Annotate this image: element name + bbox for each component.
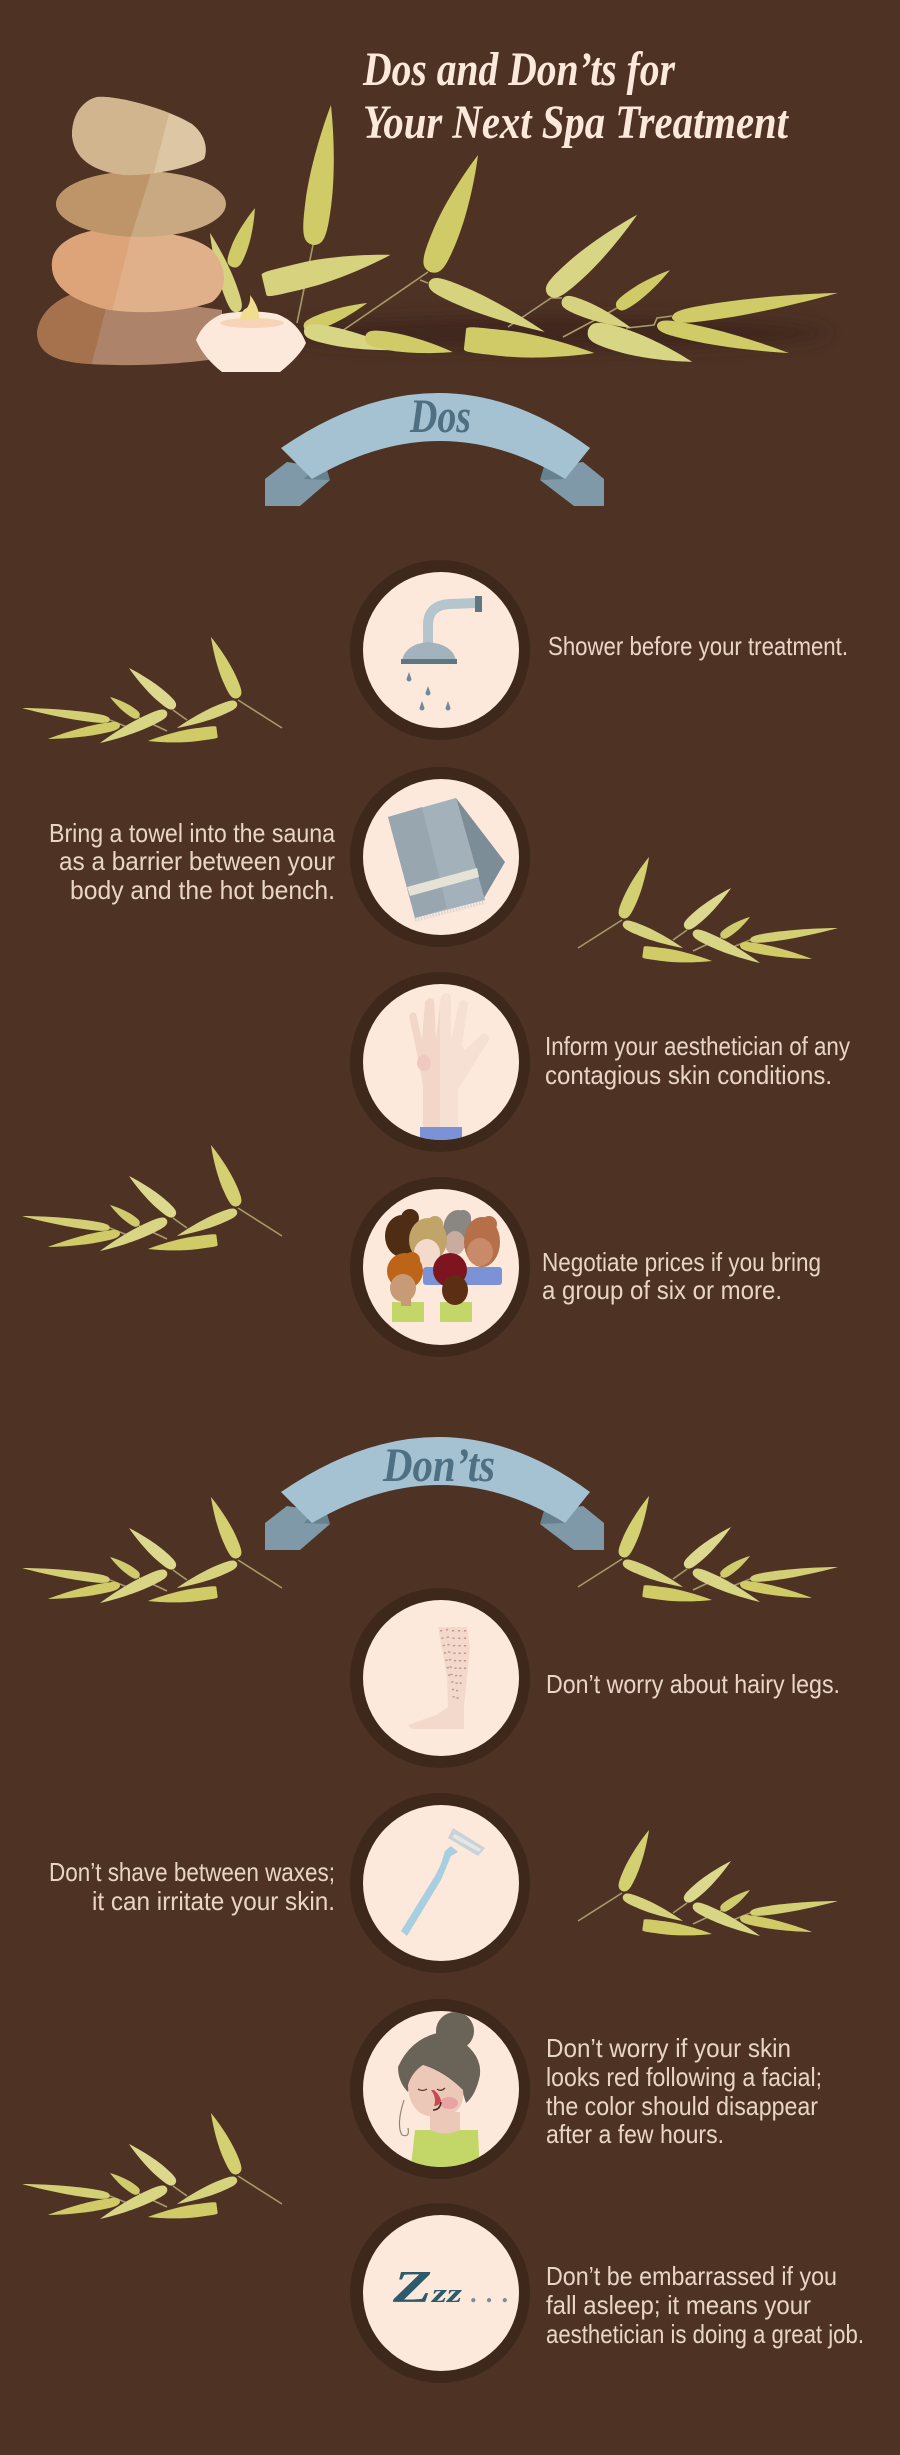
panel: asleep	[350, 2203, 864, 2383]
text: contagious skin conditions.	[545, 1060, 832, 1090]
icon: Zzz: zz	[431, 2279, 463, 2308]
icon: shower	[401, 596, 482, 710]
text: Don’t be embarrassed if you	[546, 2261, 837, 2291]
panel: legs	[350, 1588, 840, 1768]
decoration: sprig left 4	[21, 2110, 282, 2224]
icon frame	[350, 972, 530, 1152]
stone 2	[56, 171, 226, 237]
banner label: Don’ts	[382, 1439, 495, 1492]
panel: towel	[49, 767, 530, 947]
text: Don’t worry about hairy legs.	[546, 1669, 840, 1699]
text: the color should disappear	[546, 2091, 818, 2121]
icon: hairy leg	[408, 1627, 470, 1729]
icon: Zzz: Z	[392, 2261, 432, 2312]
text	[542, 1247, 821, 1305]
decoration: sprig right 2	[578, 1493, 839, 1607]
text: fall asleep; it means your	[546, 2290, 811, 2320]
icon: Zzz: ...	[471, 2279, 509, 2308]
icon: hand	[409, 993, 489, 1140]
icon: Zzz	[392, 2261, 509, 2312]
title	[362, 43, 789, 149]
text: a group of six or more.	[542, 1275, 782, 1305]
illustration: bamboo branch	[203, 103, 839, 373]
stone 4	[37, 293, 222, 365]
illustration: stacked stones	[37, 97, 226, 365]
decoration: sprig left 2	[21, 1142, 282, 1256]
text	[49, 1857, 335, 1916]
icon: group of women	[385, 1209, 502, 1322]
panel: facial	[350, 1999, 822, 2179]
icon frame	[350, 1177, 530, 1357]
text: Negotiate prices if you bring	[542, 1247, 821, 1277]
banner: Dos	[265, 390, 604, 506]
icon frame	[350, 767, 530, 947]
panel: shower	[350, 560, 848, 740]
text	[546, 2033, 822, 2149]
text: it can irritate your skin.	[92, 1886, 335, 1916]
text: looks red following a facial;	[546, 2062, 822, 2092]
text: after a few hours.	[546, 2119, 724, 2149]
icon: towel	[388, 798, 505, 920]
banner: Don'ts	[265, 1437, 604, 1550]
text: Don’t shave between waxes;	[49, 1857, 335, 1887]
text	[545, 1031, 850, 1090]
icon: razor	[401, 1828, 485, 1936]
text: as a barrier between your	[59, 846, 335, 876]
decoration: sprig left 3	[21, 1494, 282, 1608]
icon: candle	[196, 295, 306, 372]
icon frame	[350, 2203, 530, 2383]
decoration: sprig left 1	[21, 634, 282, 748]
title: Your Next Spa Treatment	[363, 96, 789, 149]
banner label: Dos	[409, 390, 471, 443]
text: Don’t worry if your skin	[546, 2033, 791, 2063]
text: Inform your aesthetician of any	[545, 1031, 850, 1061]
text: Bring a towel into the sauna	[49, 818, 335, 848]
stone 1	[72, 97, 206, 175]
panel: hand	[350, 972, 850, 1152]
text: Shower before your treatment.	[548, 631, 848, 661]
stone 3	[52, 229, 224, 312]
icon frame	[350, 1999, 530, 2179]
icon frame	[350, 1793, 530, 1973]
icon frame	[350, 560, 530, 740]
text	[49, 818, 335, 905]
icon: woman after facial	[398, 2012, 480, 2175]
panel: group	[350, 1177, 821, 1357]
decoration: sprig right 3	[578, 1827, 839, 1941]
text: body and the hot bench.	[70, 875, 335, 905]
icon frame	[350, 1588, 530, 1768]
text	[546, 2261, 864, 2349]
title: Dos and Don’ts for	[362, 43, 676, 96]
panel: razor	[49, 1793, 530, 1973]
decoration: sprig right 1	[578, 854, 839, 968]
